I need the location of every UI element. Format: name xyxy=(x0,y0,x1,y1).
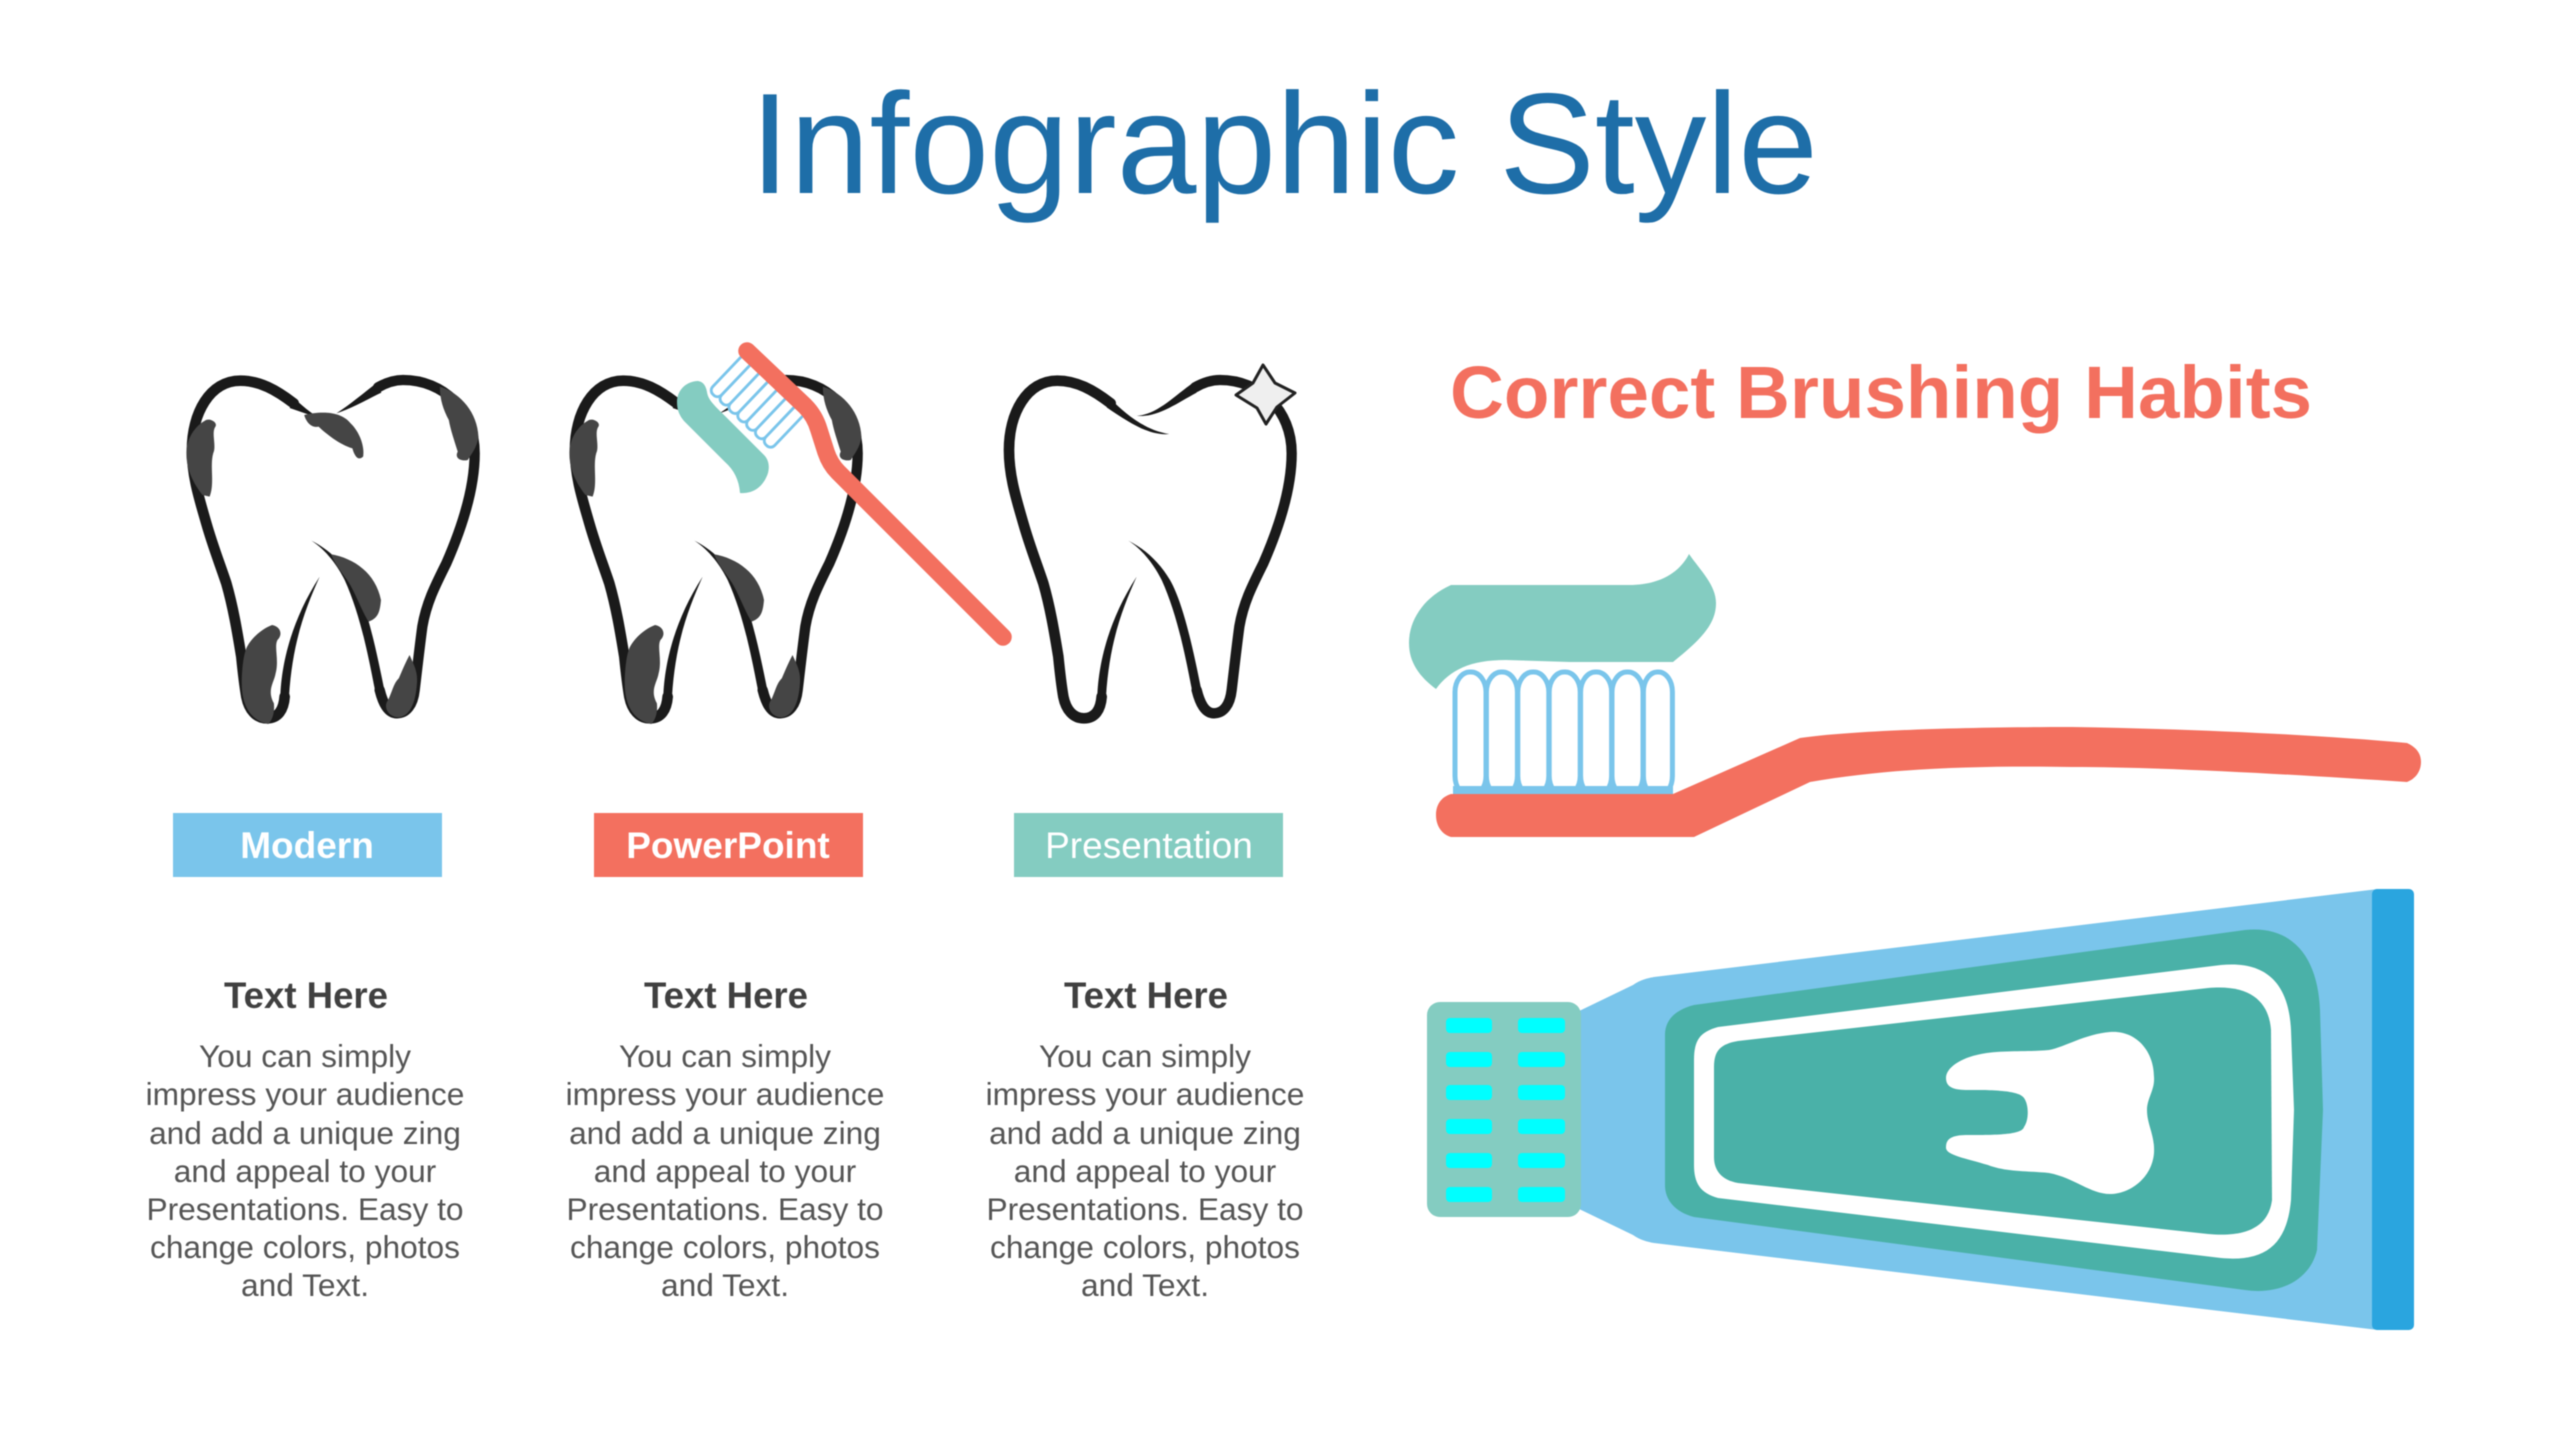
column 1 body: You can simply xyxy=(199,1038,411,1074)
column 2 heading: Text Here xyxy=(644,975,808,1016)
column 1 body: and add a unique zing xyxy=(149,1115,461,1151)
text block: column 2 xyxy=(566,975,884,1303)
white tooth emblem xyxy=(1946,1032,2154,1194)
icon: tooth being brushed xyxy=(569,351,1003,724)
tube body xyxy=(1575,889,2378,1330)
icon: clean tooth with sparkle xyxy=(1009,365,1295,718)
label: PowerPoint xyxy=(594,813,863,877)
tooth outline xyxy=(575,380,858,718)
handle xyxy=(1436,727,2421,837)
column 2 body: Presentations. Easy to xyxy=(566,1191,884,1227)
column 3 body: Presentations. Easy to xyxy=(986,1191,1304,1227)
column 3 body: and appeal to your xyxy=(1014,1153,1277,1189)
column 3 heading: Text Here xyxy=(1064,975,1228,1016)
column 2 body: change colors, photos xyxy=(570,1229,880,1265)
column 1 body: impress your audience xyxy=(146,1076,464,1112)
label: PowerPoint: PowerPoint xyxy=(626,825,830,866)
label: Modern xyxy=(173,813,442,877)
clean tooth xyxy=(1009,380,1292,718)
column 2 body: You can simply xyxy=(619,1038,831,1074)
column 2 body: impress your audience xyxy=(566,1076,884,1112)
label: Modern: Modern xyxy=(240,825,374,866)
label: Presentation: Presentation xyxy=(1045,825,1253,866)
text block: column 1 xyxy=(146,975,464,1303)
column 3 body: change colors, photos xyxy=(990,1229,1300,1265)
plaque patches xyxy=(186,387,478,724)
tube label xyxy=(1665,930,2323,1291)
column 3 body xyxy=(986,1038,1304,1303)
column 1 body: and appeal to your xyxy=(174,1153,437,1189)
label: Presentation xyxy=(1014,813,1283,877)
icon: dirty tooth xyxy=(186,380,478,724)
column 3 body: and Text. xyxy=(1081,1267,1209,1303)
label white ring xyxy=(1694,964,2294,1259)
toothbrush bristles xyxy=(709,354,806,449)
column 3 body: impress your audience xyxy=(986,1076,1304,1112)
cap ridges xyxy=(1446,1018,1565,1202)
plaque patches xyxy=(569,387,861,724)
title: Infographic Style xyxy=(750,64,1818,224)
column 1 body: Presentations. Easy to xyxy=(146,1191,464,1227)
column 1 body xyxy=(146,1038,464,1303)
tube cap xyxy=(1427,1002,1581,1217)
icon: toothpaste tube xyxy=(1427,889,2414,1330)
text block: column 3 xyxy=(986,975,1304,1303)
column 3 body: and add a unique zing xyxy=(989,1115,1301,1151)
sparkle star xyxy=(1236,365,1295,424)
heading: correct brushing habits: Correct Brushing Habits xyxy=(1450,350,2312,434)
toothpaste on brush xyxy=(677,381,769,493)
column 1 body: and Text. xyxy=(241,1267,369,1303)
toothbrush handle xyxy=(747,351,1003,637)
tooth outline xyxy=(192,380,475,718)
label inner panel xyxy=(1714,987,2272,1235)
icon: large toothbrush xyxy=(1409,554,2421,837)
column 2 body xyxy=(566,1038,884,1303)
tube crimp end xyxy=(2372,889,2414,1330)
column 1 body: change colors, photos xyxy=(150,1229,460,1265)
bristles xyxy=(1455,672,1672,796)
column 3 body: You can simply xyxy=(1039,1038,1251,1074)
toothpaste xyxy=(1409,554,1716,689)
column 2 body: and appeal to your xyxy=(594,1153,857,1189)
column 2 body: and Text. xyxy=(661,1267,789,1303)
column 1 heading: Text Here xyxy=(224,975,388,1016)
column 2 body: and add a unique zing xyxy=(569,1115,881,1151)
